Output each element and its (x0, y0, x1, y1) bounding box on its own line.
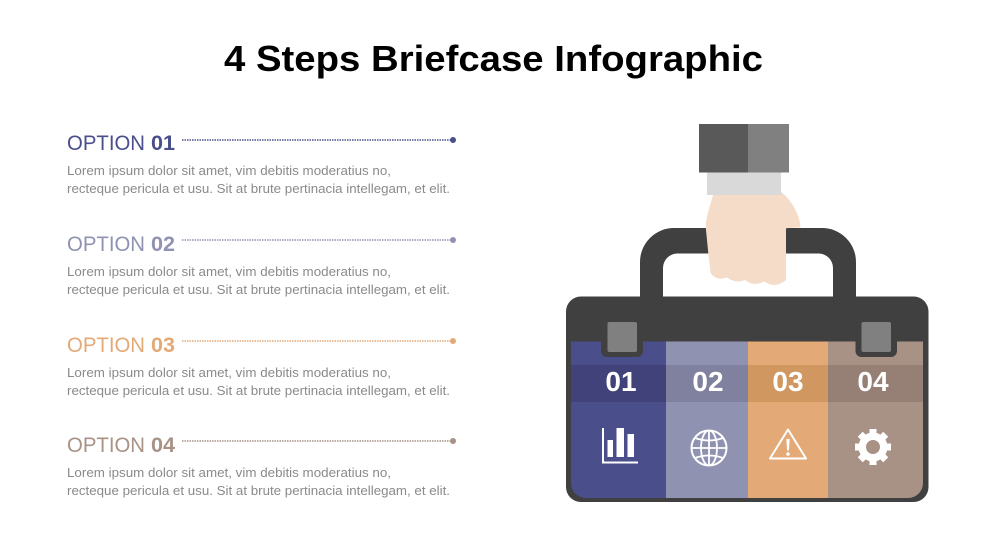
hand (706, 192, 800, 285)
panel: option 03 (67, 334, 456, 398)
text block: option 01: recteque pericula et usu. Sit at brute pertinacia intellegam, et elit. (67, 181, 450, 196)
column 04: 04 (857, 366, 889, 397)
text block: option 04 (67, 465, 450, 498)
briefcase handle (640, 228, 856, 300)
text block: option 04: recteque pericula et usu. Sit at brute pertinacia intellegam, et elit. (67, 483, 450, 498)
heading: option 02: 02 (151, 233, 175, 256)
column 01: 01 (605, 366, 637, 397)
briefcase body (566, 296, 928, 502)
text block: option 03 (67, 365, 450, 398)
text block: option 01 (67, 163, 450, 196)
shirt cuff (707, 172, 781, 195)
column 01 (571, 342, 666, 498)
leader line: option 03 (182, 338, 456, 344)
heading: option 03: OPTION (67, 334, 145, 357)
panel: option 01 (67, 132, 456, 196)
jacket sleeve (699, 124, 789, 172)
heading: option 02: OPTION (67, 233, 145, 256)
column 02: 02 (692, 366, 724, 397)
icon: gear (855, 429, 891, 465)
icon: bar chart (602, 428, 638, 464)
text block: option 02 (67, 264, 450, 297)
column 03: 03 (772, 366, 804, 397)
text block: option 03: Lorem ipsum dolor sit amet, vim debitis moderatius no, (67, 365, 391, 380)
panel: option 04 (67, 434, 456, 498)
heading: option 04: OPTION (67, 434, 145, 457)
column 02 (666, 342, 748, 498)
title: 4 Steps Briefcase Infographic (224, 38, 763, 79)
heading: option 03: 03 (151, 334, 175, 357)
text block: option 02: Lorem ipsum dolor sit amet, vim debitis moderatius no, (67, 264, 391, 279)
icon: warning triangle (770, 430, 806, 458)
leader line: option 01 (182, 137, 456, 143)
text block: option 03: recteque pericula et usu. Sit at brute pertinacia intellegam, et elit. (67, 383, 450, 398)
text block: option 04: Lorem ipsum dolor sit amet, vim debitis moderatius no, (67, 465, 391, 480)
icon: globe (692, 430, 726, 466)
column 04 (828, 342, 923, 498)
text block: option 02: recteque pericula et usu. Sit at brute pertinacia intellegam, et elit. (67, 282, 450, 297)
left clasp (601, 322, 643, 357)
briefcase illustration (566, 124, 928, 502)
leader line: option 04 (182, 438, 456, 444)
heading: option 01: 01 (151, 132, 175, 155)
column 03 (748, 342, 828, 498)
text block: option 01: Lorem ipsum dolor sit amet, vim debitis moderatius no, (67, 163, 391, 178)
heading: option 04: 04 (151, 434, 175, 457)
right clasp (856, 322, 897, 357)
panel: option 02 (67, 233, 456, 297)
leader line: option 02 (182, 237, 456, 243)
heading: option 01: OPTION (67, 132, 145, 155)
